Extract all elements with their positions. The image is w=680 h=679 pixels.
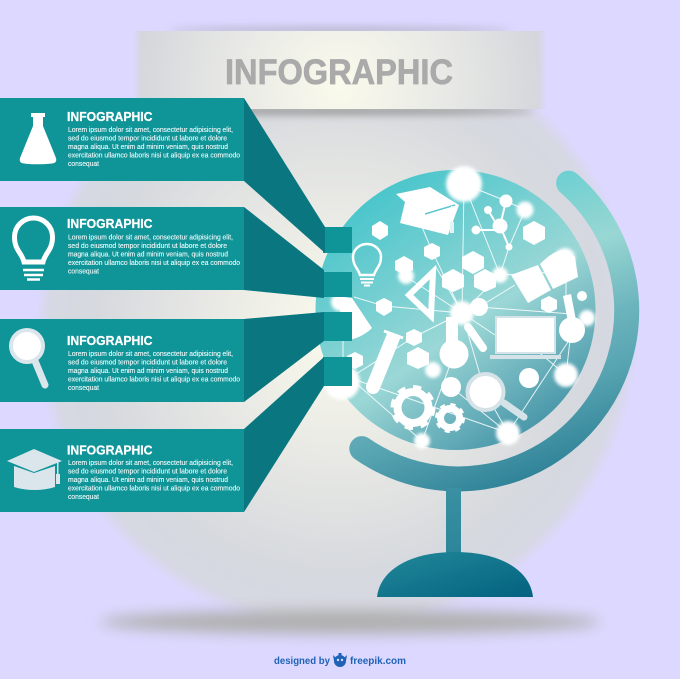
text block: magna aliqua. Ut enim ad minim veniam, quis nostrud <box>68 475 228 484</box>
text block: magna aliqua. Ut enim ad minim veniam, quis nostrud <box>68 250 228 258</box>
text block: exercitation ullamco laboris nisi ut aliquip ex ea commodo <box>68 150 240 160</box>
text block <box>68 232 240 276</box>
text block: magna aliqua. Ut enim ad minim veniam, quis nostrud <box>68 366 228 375</box>
text block: sed do eiusmod tempor incididunt ut labore et dolore <box>68 241 227 250</box>
icon: small gear <box>437 405 463 431</box>
text block: exercitation ullamco laboris nisi ut aliquip ex ea commodo <box>68 258 240 267</box>
icon: graduation cap <box>396 187 459 235</box>
text block: consequat <box>68 159 100 168</box>
ring of globe <box>362 183 627 479</box>
title band <box>133 27 547 115</box>
text block: consequat <box>68 383 100 392</box>
glowing nodes <box>324 166 595 449</box>
footer credit: designed by <box>274 656 330 667</box>
globe stand <box>377 488 533 597</box>
icon: molecule <box>472 195 512 250</box>
hexagons <box>347 221 557 369</box>
text block <box>68 125 240 168</box>
connector tabs <box>323 227 352 386</box>
icon: light bulb <box>14 218 52 280</box>
icon: book <box>511 250 578 303</box>
footer credit <box>274 653 406 667</box>
icon: magnifier <box>468 374 524 417</box>
icon: laptop <box>490 317 561 359</box>
text block: Lorem ipsum dolor sit amet, consectetur adipisicing elit, <box>68 349 233 358</box>
heading: INFOGRAPHIC <box>67 334 152 348</box>
icon: center flask <box>440 317 483 368</box>
text block: Lorem ipsum dolor sit amet, consectetur adipisicing elit, <box>68 125 233 134</box>
globe <box>316 166 596 450</box>
panel 4 <box>0 357 324 512</box>
icon: triangle ruler <box>409 272 433 316</box>
heading: INFOGRAPHIC <box>67 110 152 124</box>
text block: consequat <box>68 492 100 501</box>
text block <box>68 349 240 392</box>
background glow circle <box>35 28 639 632</box>
text block: magna aliqua. Ut enim ad minim veniam, quis nostrud <box>68 142 228 151</box>
text block: Lorem ipsum dolor sit amet, consectetur adipisicing elit, <box>68 458 233 467</box>
text block: exercitation ullamco laboris nisi ut aliquip ex ea commodo <box>68 484 240 492</box>
icon: graduation cap <box>7 449 62 490</box>
panel 1 <box>0 98 325 253</box>
footer credit: freepik.com <box>350 656 406 667</box>
text block: consequat <box>68 266 100 276</box>
panel 3 <box>0 312 324 402</box>
title: INFOGRAPHIC <box>225 53 453 92</box>
text block: sed do eiusmod tempor incididunt ut labore et dolore <box>68 358 227 366</box>
icon: freepik logo <box>333 653 347 667</box>
text block: sed do eiusmod tempor incididunt ut labore et dolore <box>68 134 227 142</box>
ground shadow <box>100 610 600 634</box>
heading: INFOGRAPHIC <box>67 444 152 458</box>
icon: test tube <box>366 331 403 394</box>
text block: sed do eiusmod tempor incididunt ut labore et dolore <box>68 466 227 476</box>
icon: large gear <box>393 388 433 428</box>
icon: hidden flask behind tabs <box>338 298 372 341</box>
text block <box>68 458 240 501</box>
icon: small light bulb <box>353 244 381 286</box>
network lines <box>343 184 572 441</box>
text block: Lorem ipsum dolor sit amet, consectetur adipisicing elit, <box>68 232 233 242</box>
heading: INFOGRAPHIC <box>67 217 152 231</box>
icon: magnifying glass <box>11 330 45 385</box>
icon: flask <box>20 113 56 164</box>
panel 2 <box>0 207 324 298</box>
icon: right flask <box>559 291 587 343</box>
text block: exercitation ullamco laboris nisi ut aliquip ex ea commodo <box>68 374 240 384</box>
